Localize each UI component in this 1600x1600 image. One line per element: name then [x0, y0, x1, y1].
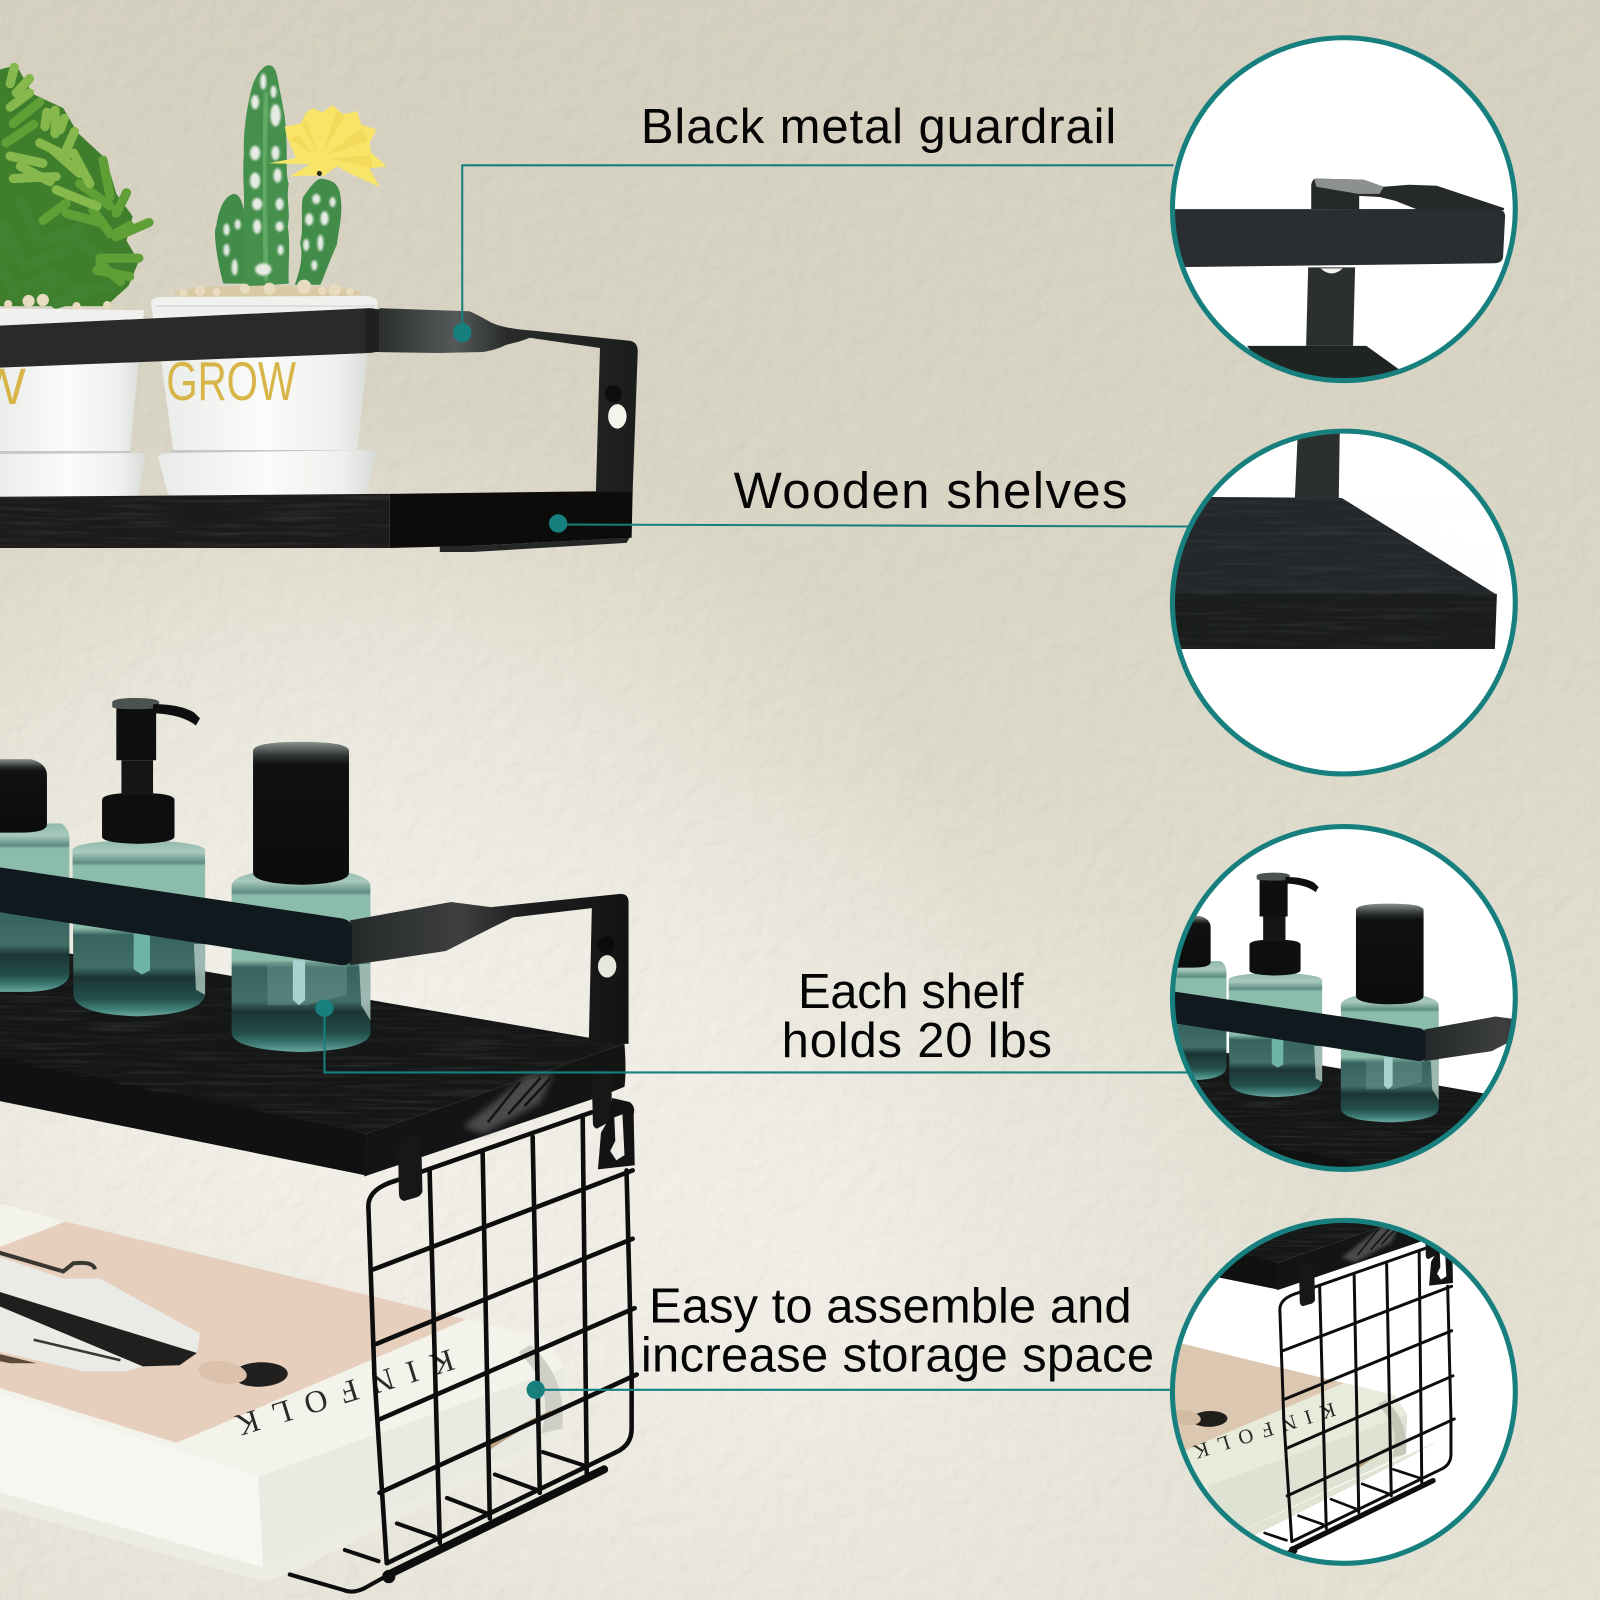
wooden shelf board	[0, 942, 626, 1177]
ring	[1172, 38, 1515, 381]
cylinder-cap bottle	[232, 742, 370, 1052]
book page block	[0, 1387, 263, 1567]
left pot	[0, 294, 146, 498]
ring	[1172, 1220, 1515, 1563]
succulent plant	[0, 65, 149, 306]
mounting hole	[1320, 268, 1343, 273]
strap highlight	[1314, 179, 1384, 194]
inset: guardrail close-up	[1163, 38, 1515, 393]
yellow flower	[268, 105, 387, 187]
mounting screw	[597, 936, 615, 954]
magazine book	[0, 1198, 612, 1582]
inset: wire basket	[1170, 1218, 1518, 1566]
label: Black metal guardrail	[641, 100, 1116, 154]
leader line	[536, 1389, 1173, 1391]
metal guardrail	[0, 864, 629, 1044]
cover figure	[0, 1247, 288, 1388]
book white cover	[0, 1198, 564, 1477]
callout: black metal guardrail	[453, 100, 1173, 342]
front rail	[1163, 209, 1505, 267]
wood grain	[1163, 497, 1497, 649]
label line one: Easy to assemble and	[649, 1279, 1132, 1333]
right pot	[151, 280, 378, 497]
strap gap	[1359, 196, 1416, 209]
cactus plant	[215, 65, 341, 287]
mounting screw	[605, 385, 622, 403]
top shelf with plants	[0, 65, 638, 552]
cross wires	[373, 1170, 637, 1493]
base wires	[290, 1452, 584, 1592]
pump bottle	[72, 698, 205, 1016]
book bottom cover	[0, 1408, 612, 1582]
front base rail	[389, 1469, 604, 1574]
right hanging bracket	[592, 1068, 612, 1129]
mounting hole	[598, 955, 616, 978]
callout: wooden shelves	[549, 462, 1190, 533]
marker dot	[453, 323, 471, 342]
book title: KINFOLK	[231, 1342, 458, 1443]
metal guardrail	[0, 308, 638, 492]
wooden shelf board	[0, 491, 633, 552]
pot label: GROW	[166, 350, 296, 412]
leader line	[462, 165, 1173, 333]
upright wires	[430, 1115, 587, 1543]
callout: each shelf holds 20 lbs	[315, 965, 1190, 1072]
inset: wooden shelf close-up	[1163, 429, 1515, 774]
marker dot	[315, 999, 334, 1017]
marker dot	[549, 514, 567, 533]
label line two: increase storage space	[641, 1328, 1154, 1382]
book end face	[258, 1367, 564, 1567]
keyhole plate	[598, 1098, 635, 1169]
ring	[1172, 431, 1515, 774]
shelf top surface	[1163, 497, 1497, 595]
leader line	[324, 1008, 1190, 1072]
leader line	[558, 524, 1190, 527]
bracket post	[1295, 429, 1340, 498]
book beige cover	[0, 1221, 466, 1443]
ring	[1172, 827, 1515, 1169]
bracket post	[1306, 267, 1355, 346]
marker dot	[527, 1381, 545, 1399]
label: Wooden shelves	[734, 462, 1128, 519]
wire basket	[290, 1068, 637, 1592]
left hanging bracket	[398, 1136, 422, 1201]
left bottle	[0, 759, 69, 992]
shelf below	[1247, 346, 1398, 378]
shelf front face	[1163, 594, 1497, 649]
label line two: holds 20 lbs	[782, 1014, 1052, 1068]
label line one: Each shelf	[798, 965, 1024, 1019]
callout: easy to assemble	[527, 1279, 1173, 1399]
frame	[368, 1112, 632, 1563]
bent strap	[1311, 179, 1504, 210]
lower shelf with bottles, book and wire basket	[0, 698, 637, 1592]
mounting hole	[608, 404, 627, 429]
inset: bottles on shelf	[1170, 824, 1518, 1172]
